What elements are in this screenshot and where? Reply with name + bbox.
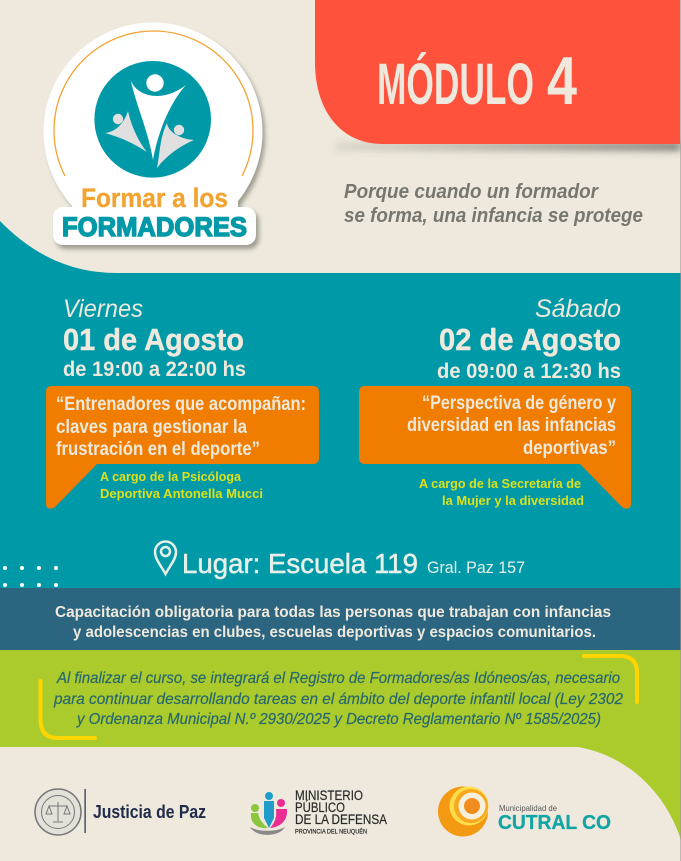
teal main panel [0,221,681,590]
date: 01 de Agosto [63,322,244,357]
logo text: Municipalidad de [499,803,557,813]
logo: Municipalidad de Cutral Co: CUTRAL CO [498,812,611,834]
module title: 4 [547,43,577,119]
logo: Ministerio Publico de la Defensa [250,787,388,836]
notice text: y Ordenanza Municipal N.º 2930/2025 y Decreto Reglamentario Nº 1585/2025) [76,711,601,728]
logo: Municipalidad de Cutral Co [438,786,611,836]
logo text: PÚBLICO [295,799,345,815]
venue [155,542,525,579]
orange speech bubble: frustración en el deporte” [56,439,260,460]
speaker credit: Deportiva Antonella Mucci [100,486,263,501]
panel: mandatory notice: y adolescencias en clubes, escuelas deportivas y espacios comunitarios. [73,624,596,641]
icon: three figures [105,74,194,168]
speaker credit: la Mujer y la diversidad [442,493,584,508]
logo text [295,787,388,836]
notice text [53,670,623,728]
orange speech bubble: deportivas” [523,438,616,459]
logo: Justicia de Paz: Justicia de Paz [93,802,206,822]
tagline: Porque cuando un formador [344,180,599,203]
orange speech bubble [359,386,631,509]
icon: location pin [155,542,176,574]
logo: Formar a los Formadores [44,22,265,249]
venue address: Gral. Paz 157 [427,559,525,577]
logo: Justicia de Paz [35,789,206,835]
orange speech bubble: claves para gestionar la [56,417,247,438]
venue name: Lugar: Escuela 119 [182,548,418,579]
panel: viernes [46,295,319,509]
logo text: PROVINCIA DEL NEUQUÉN [295,828,367,836]
orange speech bubble [46,386,319,509]
logo wordmark: Formar a los [81,183,228,213]
speaker credit [100,469,263,501]
notice text: para continuar desarrollando tareas en el ámbito del deporte infantil local (Ley 2302 [53,691,623,708]
icon: sun rings [438,786,488,836]
bracket top right [584,656,637,702]
day heading: Sábado [535,295,621,323]
date: 02 de Agosto [439,322,621,357]
time: de 09:00 a 12:30 hs [437,360,621,383]
tagline: se forma, una infancia se protege [344,204,643,227]
orange speech bubble: “Perspectiva de género y [422,393,616,414]
orange speech bubble: diversidad en las infancias [407,415,616,436]
speaker credit: A cargo de la Secretaría de [419,476,581,491]
bracket bottom left [40,681,95,738]
orange speech bubble: “Entrenadores que acompañan: [56,394,306,415]
icon: family figures [250,792,287,835]
decorative dots [3,566,58,587]
panel: registry notice [0,650,681,840]
panel: mandatory notice [0,588,681,650]
time: de 19:00 a 22:00 hs [63,358,246,381]
logo text: MINISTERIO [295,787,363,803]
red module banner [315,0,681,150]
tagline [344,180,643,227]
logo wordmark [62,183,247,242]
notice text: Al finalizar el curso, se integrará el Registro de Formadores/as Idóneos/as, necesario [56,670,620,687]
panel: mandatory notice: Capacitación obligatoria para todas las personas que trabajan con infancias [55,604,611,621]
panel: sabado [359,295,631,509]
module title: MÓDULO [377,52,534,117]
day heading: Viernes [63,295,143,323]
speaker credit [419,476,584,508]
logo wordmark: FORMADORES [62,212,247,242]
logo text: DE LA DEFENSA [295,811,388,827]
module title [377,43,577,119]
speaker credit: A cargo de la Psicóloga [100,469,242,484]
